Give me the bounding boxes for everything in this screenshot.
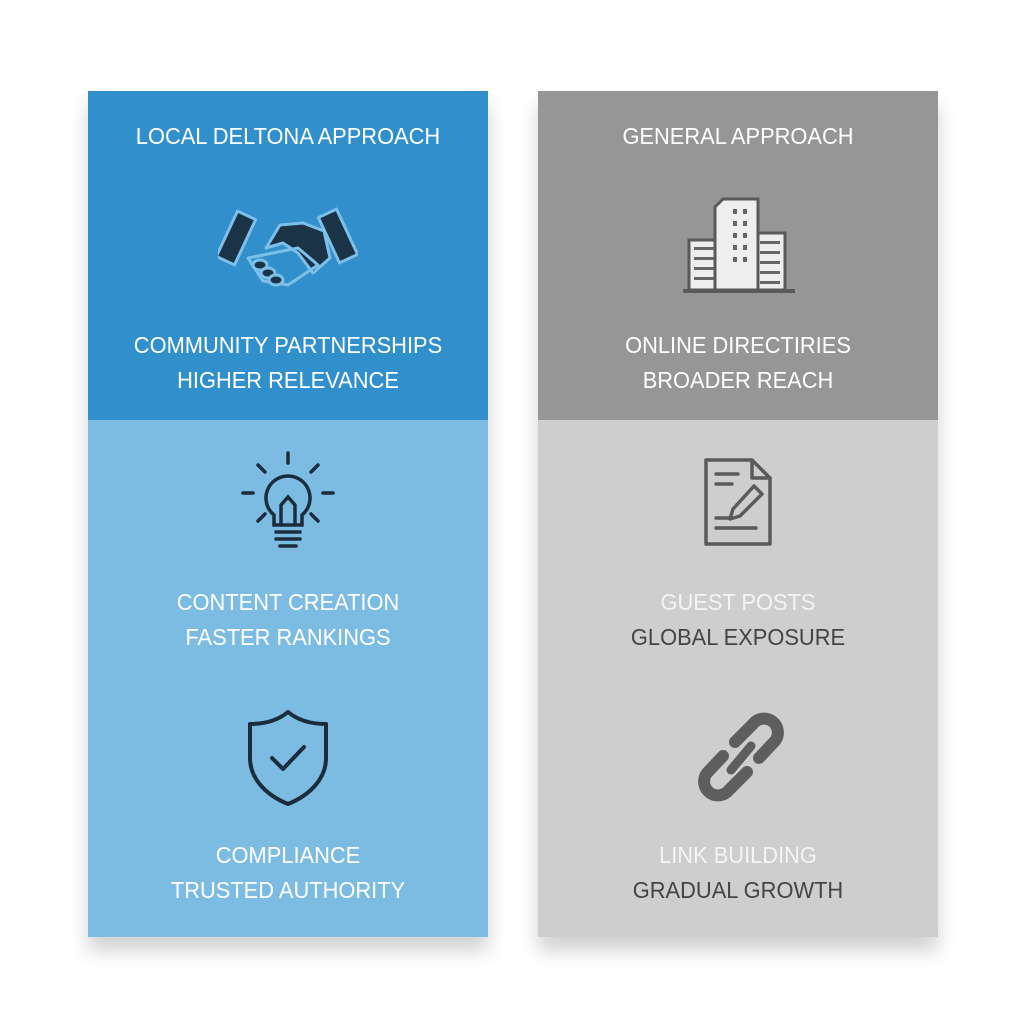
text: content creation: CONTENT CREATION — [177, 589, 399, 615]
icon: chain link — [698, 712, 784, 802]
icon: buildings — [683, 198, 795, 293]
text: global exposure: GLOBAL EXPOSURE — [631, 624, 845, 650]
bottom section light blue — [88, 420, 488, 937]
icon: handshake — [218, 208, 358, 286]
text: compliance: COMPLIANCE — [216, 842, 360, 868]
text: trusted authority: TRUSTED AUTHORITY — [171, 877, 405, 903]
heading: general: GENERAL APPROACH — [622, 123, 854, 149]
text: gradual growth: GRADUAL GROWTH — [633, 877, 843, 903]
bottom section light gray — [538, 420, 938, 937]
text: link building: LINK BUILDING — [659, 842, 817, 868]
icon: shield check — [248, 710, 328, 806]
icon: lightbulb — [241, 451, 335, 548]
text: community partnerships: COMMUNITY PARTNERSHIPS — [134, 332, 442, 358]
text: online directiries: ONLINE DIRECTIRIES — [625, 332, 851, 358]
panel: general approach — [538, 91, 938, 937]
text: faster rankings: FASTER RANKINGS — [185, 624, 391, 650]
top section blue — [88, 91, 488, 420]
heading: local: LOCAL DELTONA APPROACH — [136, 123, 440, 149]
top section gray — [538, 91, 938, 420]
icon: document pen — [704, 458, 772, 546]
text: higher relevance: HIGHER RELEVANCE — [177, 367, 399, 393]
panel: local deltona approach — [88, 91, 488, 937]
text: guest posts: GUEST POSTS — [660, 589, 815, 615]
text: broader reach: BROADER REACH — [643, 367, 833, 393]
